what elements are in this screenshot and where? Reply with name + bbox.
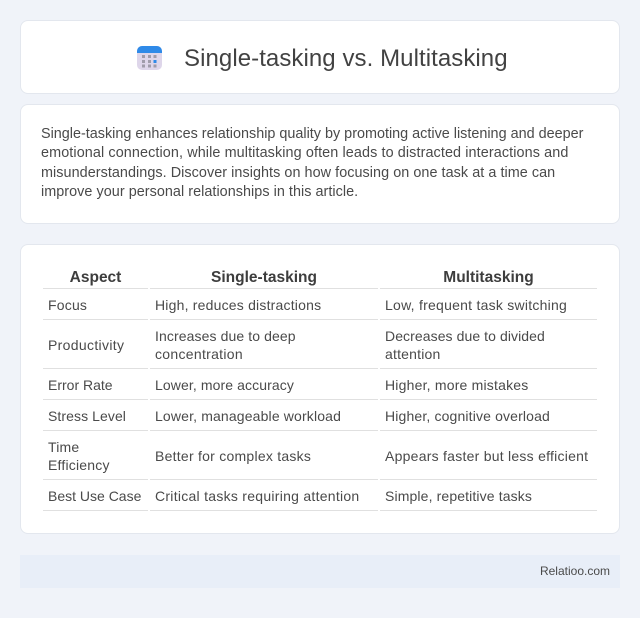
row: stress level: Higher, cognitive overload	[385, 408, 550, 424]
row: stress level: Stress Level	[48, 408, 126, 424]
row: time efficiency	[48, 439, 588, 473]
row: productivity: Decreases due to divided	[385, 328, 545, 344]
row: focus	[48, 297, 567, 313]
panel: comparison table	[20, 244, 620, 534]
row: productivity: Increases due to deep	[155, 328, 296, 344]
row: error rate: Error Rate	[48, 377, 113, 393]
intro text: improve your personal relationships in this article.	[41, 184, 358, 200]
row: error rate	[48, 377, 528, 393]
table header row: Aspect	[70, 269, 121, 286]
row: best use case: Simple, repetitive tasks	[385, 488, 532, 504]
intro text	[41, 126, 584, 200]
icon: calendar	[137, 46, 162, 70]
row: productivity: attention	[385, 346, 441, 362]
row: stress level	[48, 408, 550, 424]
row: time efficiency: Better for complex tasks	[155, 448, 311, 464]
row: error rate: Higher, more mistakes	[385, 377, 528, 393]
footer	[20, 555, 620, 588]
row: time efficiency: Appears faster but less efficient	[385, 448, 588, 464]
row: time efficiency: Efficiency	[48, 457, 110, 473]
panel: introduction	[20, 104, 620, 224]
intro text: emotional connection, while multitasking often leads to distracted interactions and	[41, 145, 568, 161]
title: Single-tasking vs. Multitasking	[184, 45, 508, 72]
row: productivity: Productivity	[48, 337, 124, 353]
table header row: Multitasking	[443, 269, 534, 286]
intro text: Single-tasking enhances relationship quality by promoting active listening and deeper	[41, 126, 583, 142]
row: best use case	[48, 488, 532, 504]
table header row: Single-tasking	[211, 269, 317, 286]
row: focus: Low, frequent task switching	[385, 297, 567, 313]
row: productivity: concentration	[155, 346, 243, 362]
footer brand: Relatioo.com	[540, 564, 610, 578]
row: focus: Focus	[48, 297, 87, 313]
row: focus: High, reduces distractions	[155, 297, 321, 313]
row: stress level: Lower, manageable workload	[155, 408, 341, 424]
row: best use case: Best Use Case	[48, 488, 141, 504]
panel: title card	[20, 20, 620, 94]
row: productivity	[48, 328, 545, 362]
row: best use case: Critical tasks requiring attention	[155, 488, 360, 504]
intro text: misunderstandings. Discover insights on how focusing on one task at a time can	[41, 165, 555, 181]
table header row	[70, 269, 534, 286]
row: time efficiency: Time	[48, 439, 79, 455]
row: error rate: Lower, more accuracy	[155, 377, 294, 393]
